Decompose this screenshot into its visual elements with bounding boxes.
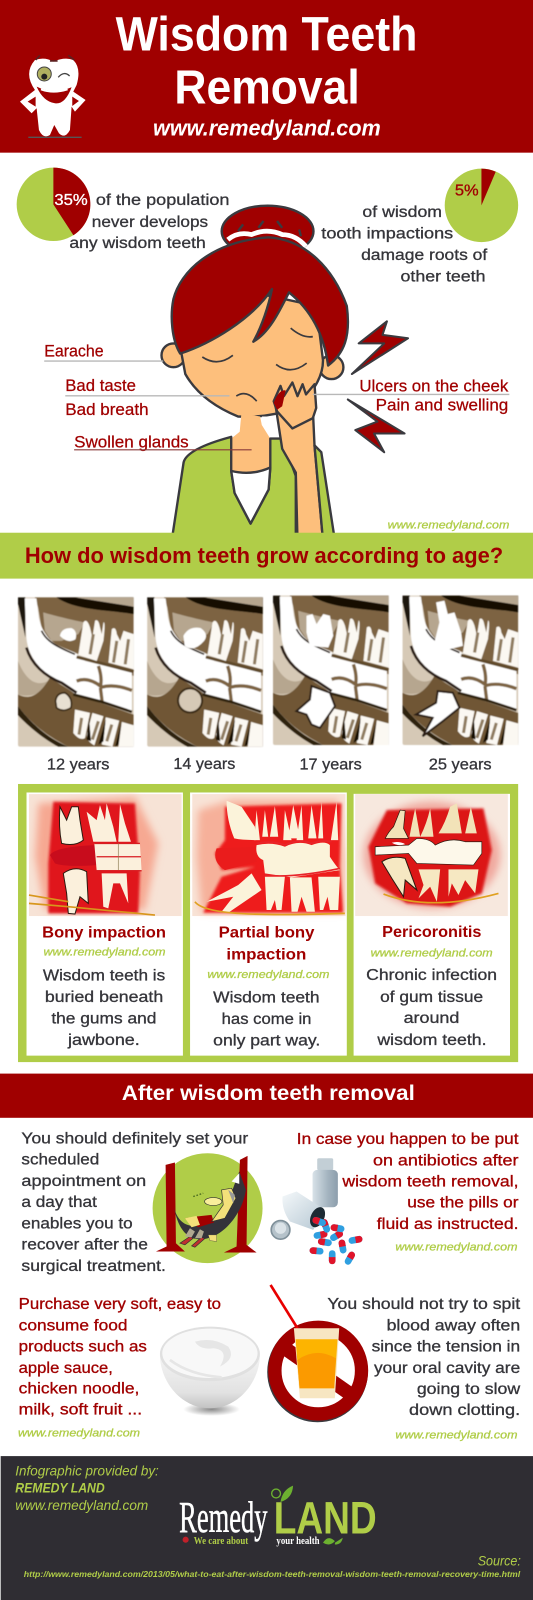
website url: www.remedyland.com bbox=[388, 520, 509, 532]
label: ulcers and pain bbox=[313, 378, 509, 414]
label: ulcers and pain: Ulcers on the cheek bbox=[359, 378, 509, 396]
text: spitting advice: down clotting. bbox=[409, 1402, 520, 1419]
text: soft food advice: Purchase very soft, easy to bbox=[19, 1296, 221, 1313]
description: bony impaction: buried beneath bbox=[45, 989, 163, 1006]
description: pericoronitis: Chronic infection bbox=[366, 967, 497, 984]
description: partial bony impaction: Wisdom teeth bbox=[213, 989, 320, 1006]
website url: www.remedyland.com bbox=[371, 948, 493, 960]
card title: bony impaction: Bony impaction bbox=[42, 924, 166, 941]
icon: tooth mascot bbox=[20, 55, 86, 137]
text: appointment advice bbox=[21, 1131, 248, 1275]
header website url: www.remedyland.com bbox=[153, 115, 381, 140]
label: bad taste and bad breath bbox=[65, 377, 230, 419]
label: earache: Earache bbox=[44, 342, 104, 360]
label: ulcers and pain: Pain and swelling bbox=[376, 396, 508, 414]
illustration: spilled pills bbox=[271, 1158, 363, 1266]
card title: pericoronitis: Pericoronitis bbox=[382, 924, 482, 941]
text: antibiotics advice: on antibiotics after bbox=[373, 1152, 518, 1169]
text: spitting advice: your oral cavity are bbox=[374, 1360, 520, 1377]
description: pericoronitis: wisdom teeth. bbox=[376, 1032, 487, 1049]
provider credit: Infographic provided by: bbox=[15, 1463, 159, 1478]
text: spitting advice bbox=[327, 1296, 521, 1419]
heading band: after removal bbox=[0, 1074, 533, 1118]
description: partial bony impaction: has come in bbox=[222, 1011, 311, 1028]
card: bony impaction bbox=[27, 792, 183, 1056]
source credit bbox=[24, 1554, 521, 1579]
label: bad taste and bad breath: Bad breath bbox=[65, 401, 149, 419]
source credit: Source: bbox=[478, 1554, 521, 1569]
heading band: how wisdom teeth grow bbox=[0, 533, 533, 579]
x-ray panel: 17 years bbox=[273, 596, 389, 745]
text: population statistic: any wisdom teeth bbox=[69, 235, 206, 252]
text: soft food advice bbox=[19, 1296, 221, 1419]
text: appointment advice: surgical treatment. bbox=[21, 1258, 166, 1275]
website url: www.remedyland.com bbox=[207, 969, 329, 981]
caption: 17 years: 17 years bbox=[300, 757, 362, 774]
text: soft food advice: apple sauce, bbox=[19, 1360, 113, 1377]
footer panel bbox=[1, 1456, 533, 1600]
description: bony impaction: Wisdom teeth is bbox=[43, 967, 165, 984]
text: population statistic: of the population bbox=[96, 192, 229, 209]
caption: 25 years: 25 years bbox=[429, 757, 492, 774]
pie chart: 35 percent bbox=[17, 168, 90, 241]
illustration: bowl of yogurt bbox=[160, 1327, 260, 1416]
heading band: how wisdom teeth grow: How do wisdom teeth grow according to age? bbox=[25, 543, 503, 568]
text: antibiotics advice: In case you happen to be put bbox=[297, 1131, 519, 1148]
website url: www.remedyland.com bbox=[44, 947, 166, 959]
pie chart: 5 percent bbox=[445, 169, 518, 242]
logo: Remedy Land: We care about bbox=[194, 1536, 249, 1547]
text: appointment advice: scheduled bbox=[21, 1152, 99, 1169]
description: bony impaction: jawbone. bbox=[67, 1032, 140, 1049]
painting: bony impaction bbox=[29, 794, 182, 916]
description: pericoronitis: of gum tissue bbox=[380, 989, 483, 1006]
x-ray panel: 12 years bbox=[18, 597, 134, 747]
text: impactions statistic: of wisdom bbox=[362, 204, 442, 221]
text: soft food advice: chicken noodle, bbox=[19, 1381, 139, 1398]
text: appointment advice: recover after the bbox=[21, 1237, 148, 1254]
logo: Remedy Land: your health bbox=[276, 1536, 320, 1547]
text: soft food advice: milk, soft fruit ... bbox=[19, 1402, 142, 1419]
text: appointment advice: a day that bbox=[21, 1194, 98, 1211]
header banner bbox=[0, 0, 533, 153]
pie chart: 35 percent: 35% bbox=[54, 192, 88, 209]
label: earache bbox=[44, 342, 163, 361]
description: bony impaction bbox=[43, 968, 165, 1049]
text: impactions statistic: other teeth bbox=[401, 269, 486, 286]
text: antibiotics advice bbox=[297, 1131, 519, 1233]
caption: 12 years: 12 years bbox=[47, 757, 110, 774]
text: soft food advice: consume food bbox=[19, 1317, 128, 1334]
provider credit bbox=[15, 1463, 159, 1513]
panel: impaction types frame bbox=[18, 784, 518, 1062]
x-ray panel: 25 years bbox=[403, 596, 518, 745]
website url: www.remedyland.com bbox=[395, 1241, 517, 1253]
text: antibiotics advice: wisdom teeth removal, bbox=[341, 1173, 519, 1190]
text: spitting advice: blood away often bbox=[387, 1317, 520, 1334]
text: population statistic bbox=[69, 192, 230, 252]
text: spitting advice: You should not try to spit bbox=[327, 1296, 521, 1313]
description: partial bony impaction bbox=[213, 989, 320, 1049]
logo: Remedy Land: LAND bbox=[274, 1492, 377, 1543]
description: partial bony impaction: only part way. bbox=[213, 1032, 320, 1049]
illustration: woman with toothache bbox=[162, 206, 348, 541]
icon: pain bolt upper bbox=[352, 321, 408, 374]
text: impactions statistic: damage roots of bbox=[361, 247, 488, 264]
title bbox=[116, 7, 418, 114]
logo: Remedy Land bbox=[179, 1486, 377, 1547]
website url: www.remedyland.com bbox=[18, 1427, 140, 1439]
section: after wisdom teeth removal bbox=[0, 1074, 533, 1600]
description: pericoronitis bbox=[366, 967, 497, 1049]
pie chart: 5 percent: 5% bbox=[455, 183, 479, 200]
text: spitting advice: since the tension in bbox=[372, 1338, 520, 1355]
text: soft food advice: products such as bbox=[19, 1338, 147, 1355]
text: population statistic: never develops bbox=[92, 214, 208, 231]
logo: Remedy Land: Remedy bbox=[179, 1492, 268, 1542]
text: impactions statistic: tooth impactions bbox=[321, 226, 453, 243]
website url: www.remedyland.com bbox=[395, 1429, 517, 1441]
description: bony impaction: the gums and bbox=[51, 1011, 156, 1028]
section: growth by age and impaction types bbox=[0, 533, 533, 1062]
text: antibiotics advice: fluid as instructed. bbox=[377, 1216, 519, 1233]
text: antibiotics advice: use the pills or bbox=[407, 1195, 518, 1212]
title: Removal bbox=[174, 60, 360, 114]
x-ray panel: 14 years bbox=[147, 597, 263, 747]
painting: pericoronitis bbox=[355, 794, 508, 916]
caption: 14 years: 14 years bbox=[173, 756, 235, 773]
provider credit: www.remedyland.com bbox=[15, 1498, 148, 1513]
text: appointment advice: enables you to bbox=[21, 1216, 133, 1233]
card: partial bony impaction bbox=[190, 792, 347, 1056]
card: pericoronitis bbox=[354, 794, 510, 1056]
heading band: after removal: After wisdom teeth removal bbox=[122, 1082, 415, 1105]
text: spitting advice: going to slow bbox=[417, 1381, 521, 1398]
icon: no drinks through straw sign bbox=[271, 1285, 362, 1415]
provider credit: REMEDY LAND bbox=[15, 1480, 105, 1495]
painting: partial bony impaction bbox=[192, 794, 346, 916]
card title: partial bony impaction bbox=[219, 924, 315, 963]
label: bad taste and bad breath: Bad taste bbox=[65, 377, 136, 395]
title: Wisdom Teeth bbox=[116, 7, 418, 61]
description: pericoronitis: around bbox=[404, 1010, 459, 1027]
card title: partial bony impaction: impaction bbox=[226, 946, 306, 963]
card title: partial bony impaction: Partial bony bbox=[219, 924, 315, 941]
text: appointment advice: appointment on bbox=[21, 1173, 146, 1190]
text: impactions statistic bbox=[321, 204, 488, 286]
illustration: man resting in hammock bbox=[153, 1153, 263, 1263]
source credit: http://www.remedyland.com/2013/05/what-to-eat-after-wisdom-teeth-removal-wisdom-teeth-removal-recovery-time.html bbox=[24, 1569, 521, 1579]
icon: pain bolt lower bbox=[348, 400, 405, 452]
label: swollen glands: Swollen glands bbox=[74, 433, 189, 451]
text: appointment advice: You should definitely set your bbox=[21, 1131, 248, 1148]
panel: symptoms and statistics bbox=[17, 168, 518, 541]
